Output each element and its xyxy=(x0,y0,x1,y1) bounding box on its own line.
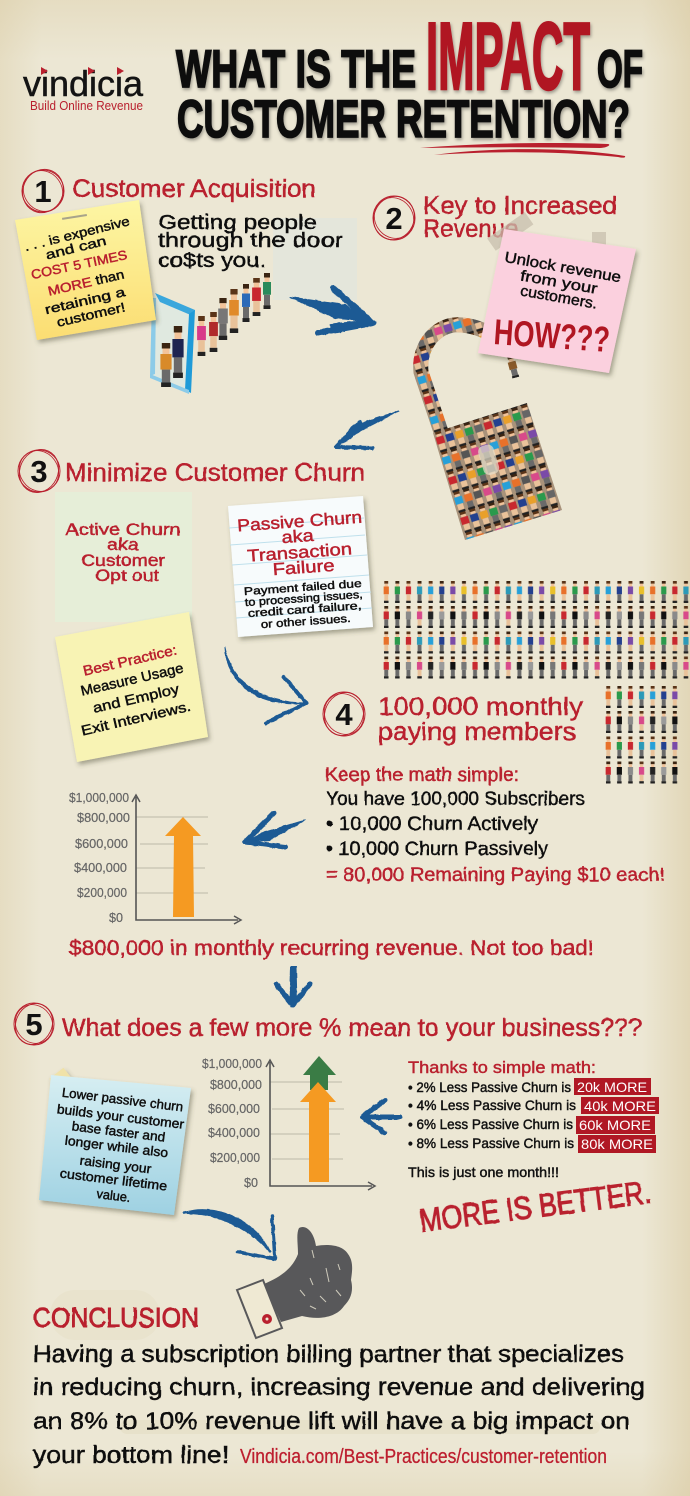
yellow note: best practice: Best Practice: xyxy=(81,642,178,679)
red highlight tags xyxy=(574,1078,659,1153)
white lined note: passive churn: Transaction xyxy=(247,539,353,566)
conclusion body: your bottom line! xyxy=(33,1442,229,1469)
white lined note: passive churn: or other issues. xyxy=(260,613,351,631)
text: getting people: co$ts you. xyxy=(158,250,266,272)
pink sticky note: Unlock revenue xyxy=(503,249,622,286)
title: WHAT IS THE xyxy=(176,40,416,99)
section 4 number badge xyxy=(316,686,372,742)
chart: 800k revenue: $0 xyxy=(109,910,123,925)
yellow sticky note xyxy=(15,200,156,340)
yellow sticky note: COST 5 TIMES xyxy=(30,247,129,282)
text: simple math list: Thanks to simple math: xyxy=(408,1058,596,1077)
section 2 heading xyxy=(423,192,617,243)
yellow note: best practice: Measure Usage xyxy=(79,659,185,699)
yellow sticky note: customer! xyxy=(55,299,127,330)
arrow to chart 2 xyxy=(362,1100,400,1133)
curved arrow to section 4 xyxy=(225,647,306,723)
conclusion body: an 8% to 10% revenue lift will have a big impact on xyxy=(33,1408,630,1435)
text: subscriber math: You have 100,000 Subscribers xyxy=(326,789,585,810)
blue sticky note: customer lifetime xyxy=(59,1166,168,1194)
section 1 number badge: 1 xyxy=(34,174,52,209)
text: subscriber math: Keep the math simple: xyxy=(325,765,519,786)
section 5 number badge xyxy=(8,997,60,1051)
text: getting people: Getting people xyxy=(158,212,317,234)
section 1 heading: Customer Acquisition xyxy=(72,175,316,203)
section 2 heading: Key to Increased xyxy=(423,192,617,220)
arrow to chart xyxy=(245,813,305,847)
text: subscriber math: • 10,000 Churn Actively xyxy=(326,814,539,835)
section 2 number badge: 2 xyxy=(385,201,403,236)
icon: thumbs up xyxy=(237,1227,352,1338)
red highlight tags: 40k MORE xyxy=(584,1098,656,1114)
white lined note: passive churn xyxy=(228,496,373,637)
chart: 800k revenue: $600,000 xyxy=(75,836,128,851)
text: simple math list: • 8% Less Passive Churn is xyxy=(408,1135,574,1151)
title xyxy=(176,3,643,149)
chart: 800k revenue xyxy=(69,790,241,925)
white lined note: passive churn: to processing issues, xyxy=(245,589,363,609)
yellow note: best practice: Exit Interviews. xyxy=(80,698,192,739)
green note: active churn: Opt out xyxy=(95,566,159,585)
section 2 number badge xyxy=(366,190,422,246)
padlock made of people xyxy=(421,325,562,540)
green note: active churn xyxy=(55,492,192,622)
faded back door xyxy=(273,218,357,300)
section 5 number badge: 5 xyxy=(25,1007,43,1042)
blue sticky note: Lower passive churn xyxy=(61,1085,184,1114)
white lined note: passive churn: Passive Churn xyxy=(237,508,363,535)
yellow note: best practice xyxy=(55,612,208,762)
blue sticky note: base faster and xyxy=(71,1118,166,1145)
yellow sticky note: and can xyxy=(44,233,108,262)
text: subscriber math: = 80,000 Remaining Paying $10 each! xyxy=(326,865,665,886)
conclusion body xyxy=(33,1341,645,1469)
title underline brush xyxy=(420,143,625,158)
section 2 heading: Revenue xyxy=(423,215,518,243)
logo: vindicia: vindicia xyxy=(23,63,144,104)
pink sticky note xyxy=(478,229,636,373)
white lined note: passive churn: aka xyxy=(281,526,315,547)
chart: revenue with lift: $0 xyxy=(244,1175,258,1190)
chart: revenue with lift: $1,000,000 xyxy=(202,1056,262,1071)
arrow to section 2 xyxy=(290,288,373,333)
green note: active churn: aka xyxy=(107,535,140,554)
yellow sticky note: retaining a xyxy=(43,284,128,317)
text: simple math list: • 2% Less Passive Churn is xyxy=(408,1079,571,1095)
blue sticky note: longer while also xyxy=(64,1133,169,1160)
crowd of people xyxy=(381,581,690,784)
section 4 heading: paying members xyxy=(378,718,576,746)
door and queue of people xyxy=(150,273,271,394)
chart: revenue with lift xyxy=(202,1056,375,1190)
section 4 heading: 100,000 monthly xyxy=(378,693,584,721)
section 3 number badge: 3 xyxy=(30,454,48,489)
text: simple math list: • 4% Less Passive Churn is xyxy=(408,1097,576,1113)
yellow sticky note: . . . is expensive xyxy=(23,213,131,254)
white lined note: passive churn: Payment failed due xyxy=(244,578,362,598)
green note: active churn: Customer xyxy=(81,551,165,570)
title: OF xyxy=(597,40,643,99)
pink sticky note: customers. xyxy=(519,282,599,313)
green note: active churn: Active Churn xyxy=(66,520,180,539)
curved arrow to thumb xyxy=(184,1210,275,1259)
red highlight tags: 20k MORE xyxy=(577,1079,647,1095)
section 3 heading: Minimize Customer Churn xyxy=(65,459,365,487)
conclusion heading: CONCLUSION xyxy=(33,1302,199,1333)
section 4 number badge: 4 xyxy=(335,697,353,732)
logo: vindicia: Build Online Revenue xyxy=(30,98,143,113)
section 5 heading: What does a few more % mean to your business??? xyxy=(62,1014,642,1042)
red highlight tags: 60k MORE xyxy=(579,1117,651,1133)
text: simple math list: • 6% Less Passive Churn is xyxy=(408,1116,573,1132)
section 3 number badge xyxy=(11,443,67,499)
chart: revenue with lift: $400,000 xyxy=(208,1125,260,1140)
chart: 800k revenue: $400,000 xyxy=(74,860,127,875)
white lined note: passive churn: credit card failure, xyxy=(248,600,362,620)
chart: revenue with lift: $200,000 xyxy=(210,1150,260,1165)
section 1 number badge xyxy=(15,163,71,219)
section 4 heading xyxy=(378,693,584,746)
chart: 800k revenue: $200,000 xyxy=(77,885,127,900)
yellow sticky note: MORE than xyxy=(46,267,126,299)
chart: revenue with lift: $800,000 xyxy=(210,1077,262,1092)
text: getting people xyxy=(158,212,343,272)
arrow to section 3 xyxy=(336,411,399,448)
yellow note: best practice: and Employ xyxy=(91,680,181,716)
text: simple math list: This is just one month!!! xyxy=(408,1164,559,1180)
text: monthly recurring revenue: $800,000 in monthly recurring revenue. Not too bad! xyxy=(69,937,594,960)
chart: revenue with lift: $600,000 xyxy=(208,1101,260,1116)
text: simple math list xyxy=(408,1058,596,1180)
arrow down xyxy=(276,967,310,1005)
red highlight tags: 80k MORE xyxy=(581,1136,653,1152)
link text: Vindicia.com/Best-Practices/customer-retention xyxy=(240,1446,607,1468)
blue sticky note: builds your customer xyxy=(56,1101,186,1132)
tape on pink note xyxy=(487,212,606,251)
pink sticky note: from your xyxy=(519,267,599,298)
conclusion body: Having a subscription billing partner that specializes xyxy=(33,1341,624,1368)
conclusion body: in reducing churn, increasing revenue and delivering xyxy=(33,1374,645,1401)
chart: 800k revenue: $1,000,000 xyxy=(69,790,129,805)
pink sticky note: HOW??? xyxy=(493,311,611,360)
text: subscriber math xyxy=(325,765,665,886)
chart: 800k revenue: $800,000 xyxy=(77,810,130,825)
text: subscriber math: • 10,000 Churn Passively xyxy=(326,839,549,860)
text: getting people: through the door xyxy=(158,230,343,252)
blue sticky note: value. xyxy=(96,1186,131,1205)
white lined note: passive churn: Failure xyxy=(272,556,335,579)
blue sticky note xyxy=(39,1068,191,1215)
blue sticky note: raising your xyxy=(79,1153,153,1176)
